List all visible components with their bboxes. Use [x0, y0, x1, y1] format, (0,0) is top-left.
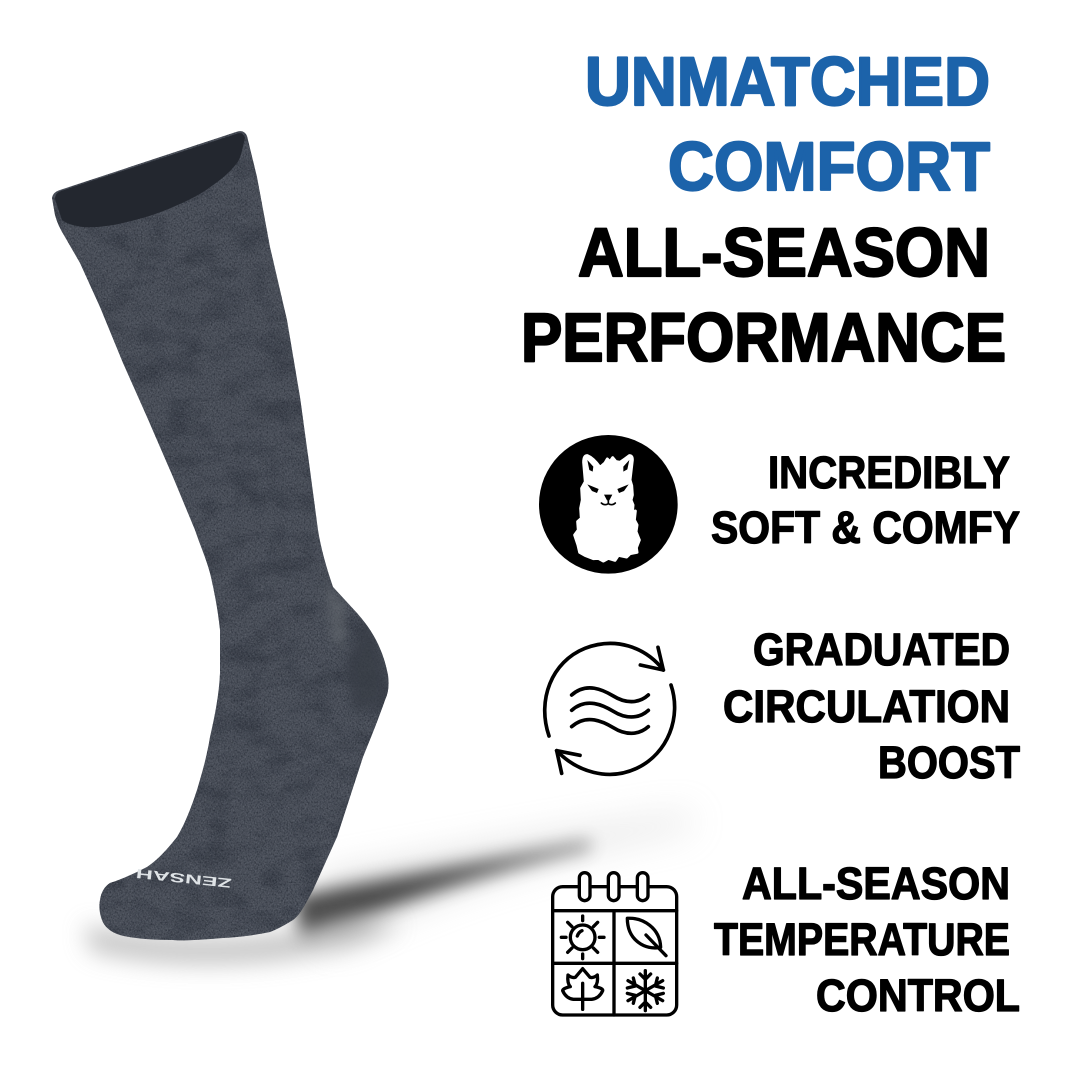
title: unmatched comfort: UNMATCHED: [585, 43, 990, 120]
leaf: [627, 918, 666, 956]
sock toe logo: ZENSAH: [135, 866, 232, 891]
sock heel patch: [346, 618, 388, 712]
snowflake: [627, 971, 663, 1011]
sock light knit texture: [40, 120, 400, 950]
sock photo: [40, 120, 400, 950]
title: unmatched comfort: [585, 43, 990, 205]
sock ankle highlight: [325, 575, 345, 650]
text: all-season temperature control: TEMPERATURE: [714, 914, 1010, 965]
text: all-season temperature control: [714, 858, 1020, 1021]
text: graduated circulation boost: BOOST: [878, 737, 1020, 788]
text: all-season temperature control: CONTROL: [816, 970, 1020, 1021]
text: incredibly soft and comfy: INCREDIBLY: [768, 447, 1010, 498]
sock dark knit texture: [40, 120, 400, 950]
icon: circulation arrows and waves: [545, 643, 675, 774]
title: unmatched comfort: COMFORT: [668, 128, 990, 205]
sock body: [40, 120, 400, 950]
sock cast shadow: [85, 815, 690, 964]
maple leaf: [563, 969, 603, 1009]
title: all-season performance: ALL-SEASON: [578, 214, 990, 291]
text: graduated circulation boost: CIRCULATION: [723, 681, 1010, 732]
icon: alpaca in black circle: [539, 435, 678, 574]
text: incredibly soft and comfy: [711, 447, 1020, 553]
title: all-season performance: PERFORMANCE: [521, 299, 1006, 376]
sock inner cuff: [55, 133, 245, 227]
text: all-season temperature control: ALL-SEASON: [742, 858, 1010, 909]
text: incredibly soft and comfy: SOFT & COMFY: [711, 502, 1020, 553]
sun: [561, 916, 604, 959]
title: all-season performance: [521, 214, 1006, 376]
text: graduated circulation boost: [723, 624, 1020, 788]
icon: four-season calendar: [553, 873, 677, 1015]
sock mottled shading: [40, 120, 400, 950]
text: graduated circulation boost: GRADUATED: [753, 624, 1010, 675]
